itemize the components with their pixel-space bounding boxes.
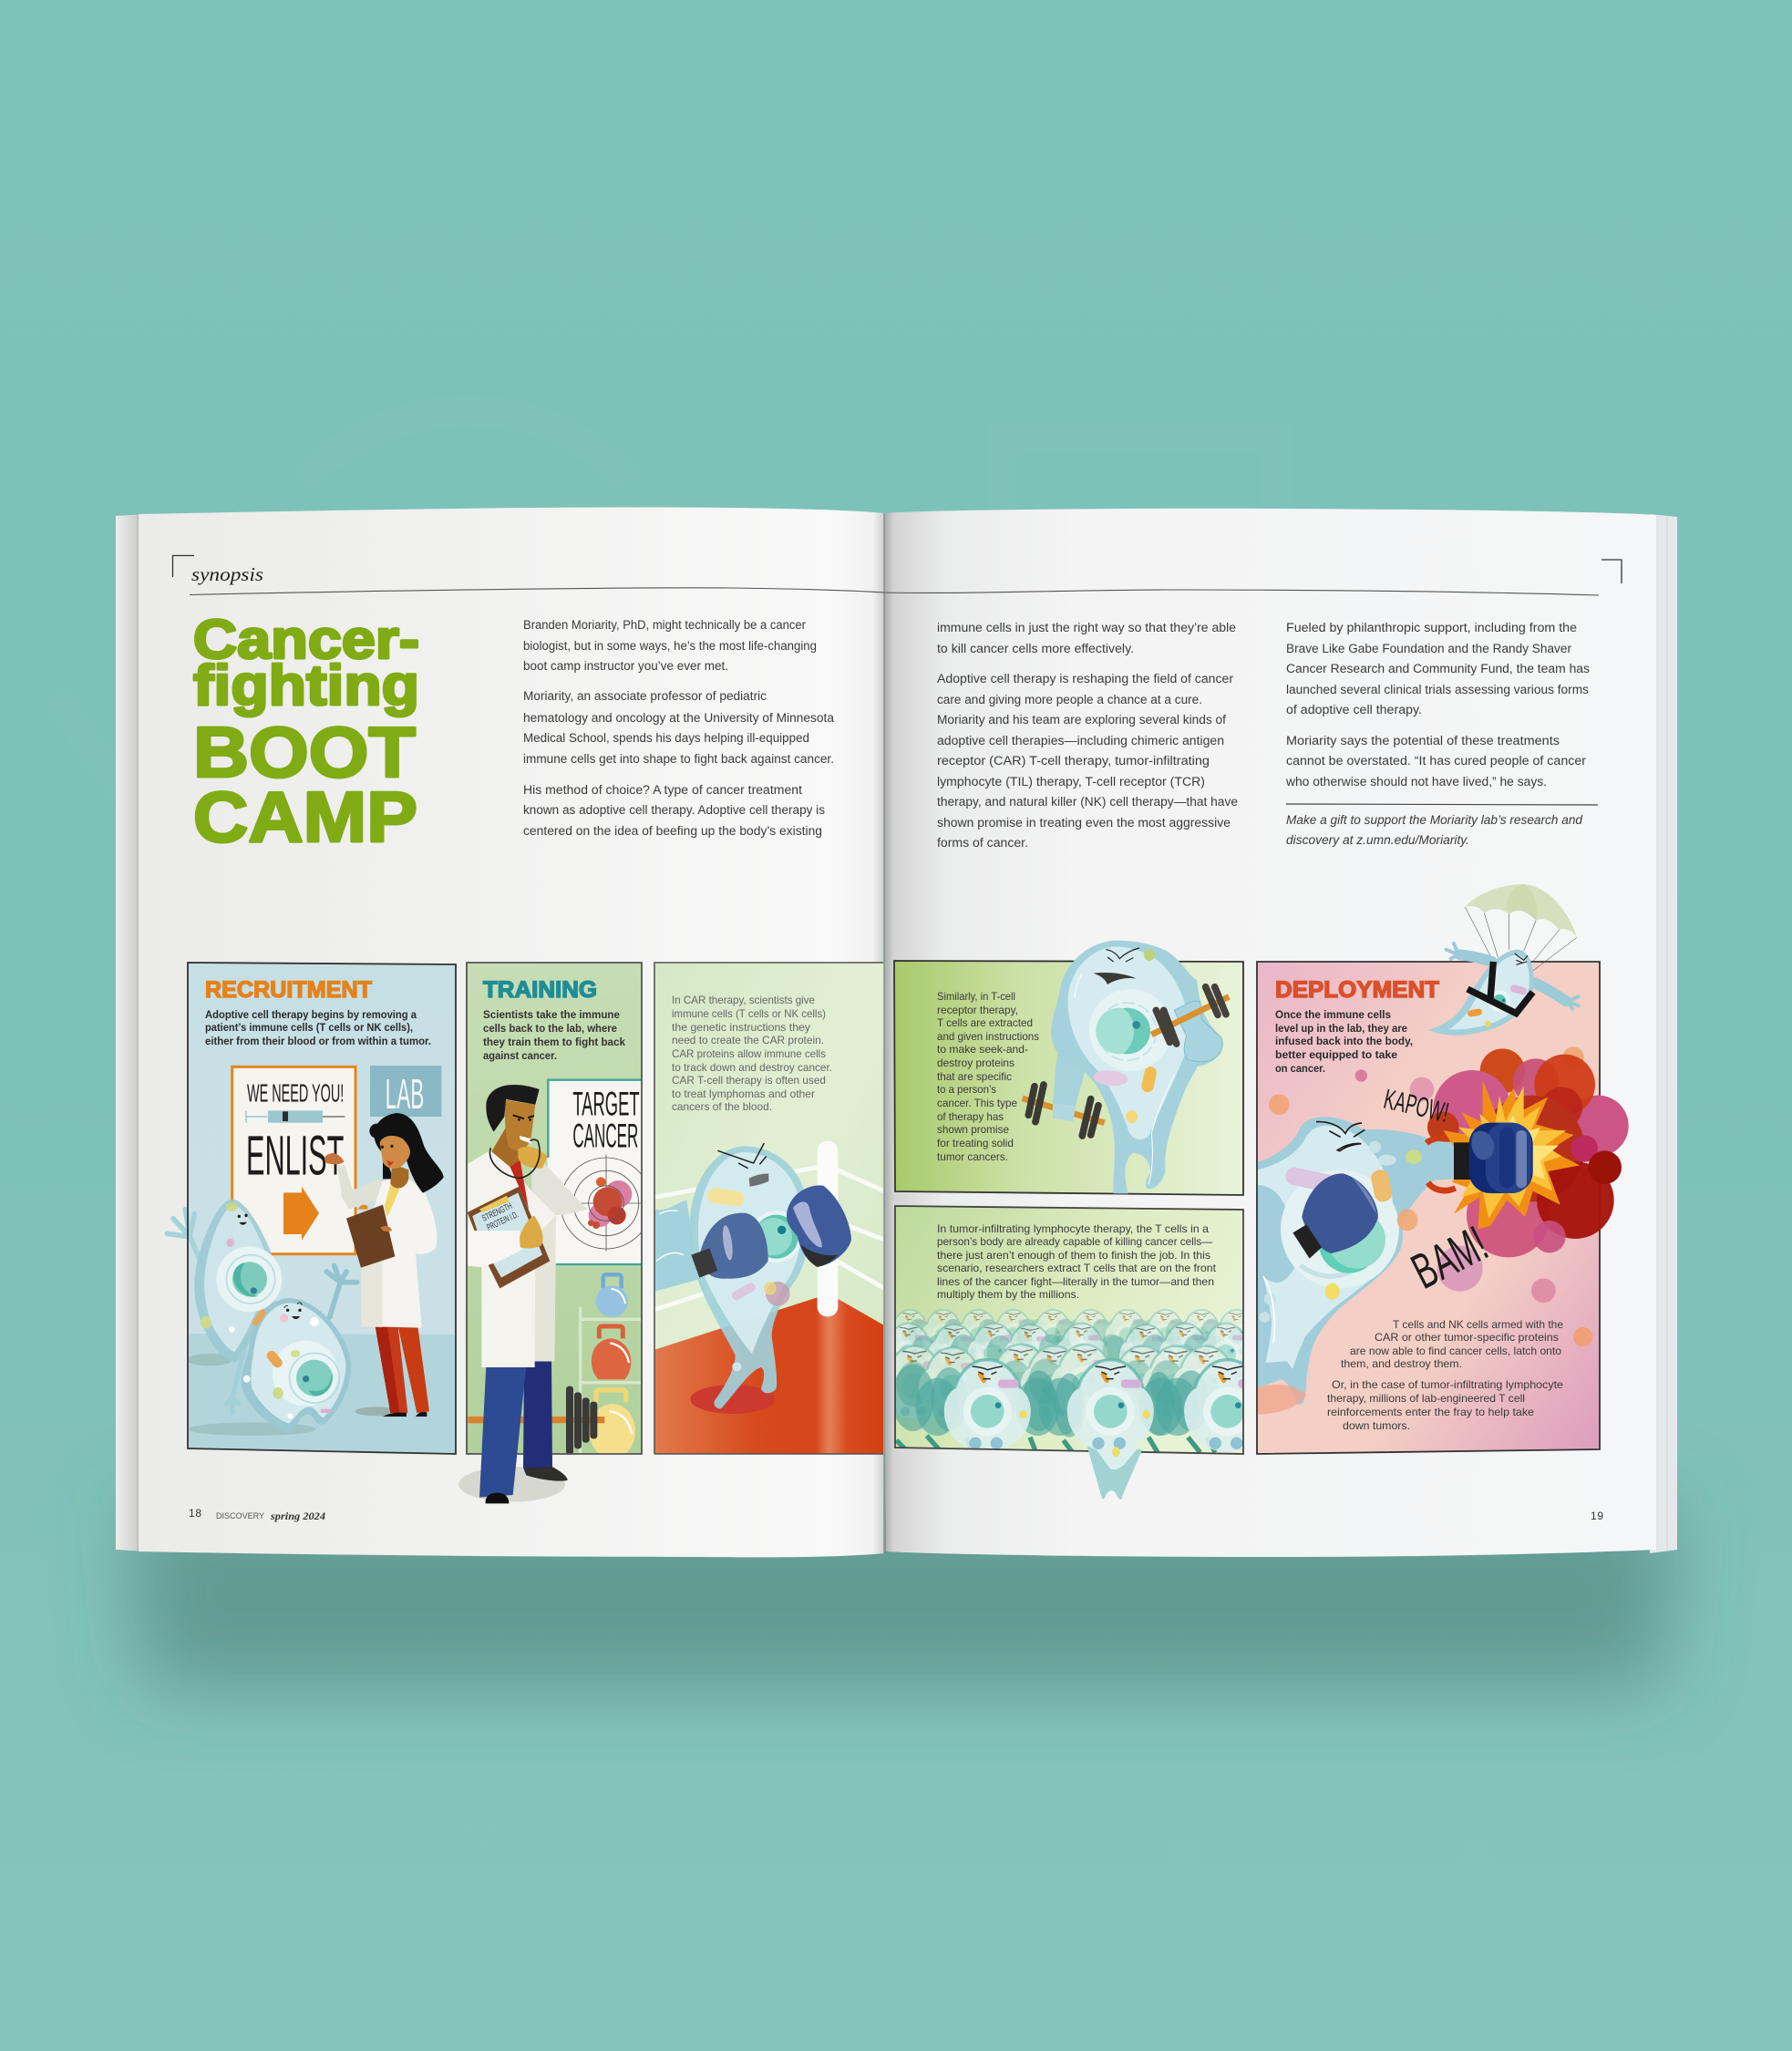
- body text column 1: Branden Moriarity, PhD, might technically be a cancer: [523, 618, 806, 632]
- car therapy text: cancers of the blood.: [672, 1100, 772, 1113]
- training gym illustration: [468, 1079, 652, 1458]
- footer left: spring 2024: [270, 1510, 325, 1522]
- kapow word: KAPOW!: [1381, 1084, 1452, 1129]
- deployment heading: DEPLOYMENT: [1275, 977, 1439, 1003]
- title: BOOT: [193, 712, 416, 792]
- body text column 2: lymphocyte (TIL) therapy, T-cell receptor (TCR): [937, 775, 1205, 788]
- middle rows: [895, 1322, 1243, 1418]
- upper dumbbell: [1151, 987, 1229, 1044]
- recruitment heading: RECRUITMENT: [205, 977, 372, 1003]
- body text column 1: centered on the idea of beefing up the body’s existing: [523, 824, 822, 838]
- left page: [139, 507, 884, 1557]
- car therapy text: CAR T-cell therapy is often used: [672, 1074, 826, 1087]
- book shadow: [128, 1504, 1677, 1686]
- tcr text: T cells are extracted: [937, 1016, 1033, 1029]
- front row: [915, 1360, 1059, 1452]
- til text: lines of the cancer fight—literally in the tumor—and then: [937, 1275, 1214, 1288]
- deployment illustration: [1258, 884, 1629, 1415]
- tcr text: and given instructions: [937, 1030, 1039, 1043]
- car therapy text: to track down and destroy cancer.: [672, 1061, 832, 1074]
- body text column 3: Brave Like Gabe Foundation and the Randy Shaver: [1286, 642, 1572, 655]
- body text column 2: receptor (CAR) T-cell therapy, tumor-infiltrating: [937, 754, 1210, 768]
- body text column 3: Cancer Research and Community Fund, the team has: [1286, 662, 1590, 675]
- deployment intro text: [1275, 1008, 1413, 1075]
- explosion cloud: [1427, 1046, 1629, 1257]
- boxing illustration: [654, 1141, 884, 1455]
- panel: tumor-infiltrating lymphocyte therapy: [894, 1205, 1244, 1500]
- body text column 3: discovery at z.umn.edu/Moriarity.: [1286, 833, 1469, 847]
- lower dumbbell: [1023, 1085, 1105, 1136]
- tcr text: shown promise: [937, 1123, 1009, 1136]
- body text column 1: hematology and oncology at the University of Minnesota: [523, 711, 834, 725]
- body text column 2: therapy, and natural killer (NK) cell therapy—that have: [937, 795, 1238, 809]
- tcr text: of therapy has: [937, 1110, 1004, 1123]
- til text: multiply them by the millions.: [937, 1288, 1079, 1301]
- lab sign: LAB: [386, 1070, 424, 1118]
- training text: they train them to fight back: [483, 1036, 625, 1048]
- panel: deployment: [1257, 884, 1629, 1454]
- body text column 2: [937, 621, 1238, 850]
- body text column 3: of adoptive cell therapy.: [1286, 703, 1422, 716]
- body text column 2: Moriarity and his team are exploring several kinds of: [937, 713, 1226, 727]
- car therapy text: [672, 994, 832, 1113]
- tcr text: to make seek-and-: [937, 1043, 1028, 1056]
- gym shelf: [581, 1306, 643, 1454]
- recruitment illustration: [167, 1066, 444, 1436]
- crop bracket right: [1601, 560, 1622, 583]
- section label: synopsis: [191, 563, 263, 585]
- body text column 2: care and giving more people a chance at a cure.: [937, 693, 1202, 706]
- car therapy text: immune cells (T cells or NK cells): [672, 1007, 826, 1020]
- teal blobs between front cells: [891, 1365, 1210, 1438]
- recruitment text: Adoptive cell therapy begins by removing a: [205, 1008, 417, 1021]
- body text column 1: His method of choice? A type of cancer treatment: [523, 783, 802, 797]
- crowd of t cells: [895, 1309, 1243, 1453]
- body text column 1: Medical School, spends his days helping ill-equipped: [523, 731, 809, 745]
- parachute: [1465, 884, 1577, 971]
- body text column 1: boot camp instructor you’ve ever met.: [523, 659, 728, 673]
- enlist poster: [232, 1067, 355, 1254]
- body text column 3: Fueled by philanthropic support, including from the: [1286, 621, 1577, 634]
- parachuting cell: [1428, 884, 1579, 1036]
- footer left: [189, 1507, 325, 1522]
- car therapy text: In CAR therapy, scientists give: [672, 994, 815, 1006]
- blue kettlebell: [596, 1274, 628, 1317]
- tcr text: Similarly, in T-cell: [937, 990, 1015, 1003]
- bam word: BAM!: [1403, 1215, 1496, 1300]
- starburst: [1443, 1080, 1580, 1229]
- title: CAMP: [193, 777, 417, 857]
- deployment closing text: Or, in the case of tumor-infiltrating lymphocyte: [1332, 1378, 1563, 1391]
- training text: cells back to the lab, where: [483, 1022, 617, 1035]
- deployment closing text: CAR or other tumor-specific proteins: [1375, 1331, 1559, 1344]
- til text: person’s body are already capable of killing cancer cells—: [937, 1235, 1212, 1248]
- body text column 3: [1285, 621, 1598, 847]
- title: [193, 609, 419, 857]
- header: synopsis and rules: [173, 556, 1622, 595]
- training text: Scientists take the immune: [483, 1008, 620, 1021]
- training text: [483, 1008, 625, 1062]
- footer left: 18: [189, 1507, 201, 1520]
- small background dots: [1269, 1069, 1592, 1346]
- right page: [884, 509, 1657, 1557]
- car therapy text: CAR proteins allow immune cells: [672, 1047, 826, 1060]
- panel: recruitment: [167, 963, 456, 1454]
- target cancer poster: [548, 1079, 652, 1264]
- recruitment text: either from their blood or from within a tumor.: [205, 1035, 431, 1047]
- panel: car therapy: [654, 963, 884, 1455]
- body text column 1: biologist, but in some ways, he’s the most life-changing: [523, 639, 817, 653]
- tcr text: that are specific: [937, 1070, 1012, 1083]
- body text column 3: launched several clinical trials assessing various forms: [1286, 683, 1589, 696]
- body text column 2: to kill cancer cells more effectively.: [937, 642, 1134, 655]
- cell character back: [167, 1200, 282, 1366]
- yellow kettlebell: [589, 1390, 635, 1458]
- body text column 1: Moriarity, an associate professor of pediatric: [523, 689, 767, 703]
- front boxing glove: [1454, 1123, 1533, 1193]
- body text column 2: immune cells in just the right way so that they’re able: [937, 621, 1236, 634]
- body text column 3: Make a gift to support the Moriarity lab’s research and: [1286, 813, 1582, 827]
- training text: against cancer.: [483, 1049, 557, 1062]
- trainer character: STRENGTH: [480, 1201, 514, 1224]
- tcr text: receptor therapy,: [937, 1004, 1018, 1016]
- left page edge: [116, 514, 146, 1551]
- body text column 2: adoptive cell therapies—including chimeric antigen: [937, 734, 1224, 747]
- header rule: [190, 588, 1599, 595]
- boxing cell: [654, 1143, 809, 1408]
- left boxing glove: [1293, 1173, 1378, 1259]
- deployment intro text: infused back into the body,: [1275, 1035, 1413, 1047]
- body text column 2: Adoptive cell therapy is reshaping the field of cancer: [937, 672, 1234, 685]
- scientist woman: [324, 1113, 444, 1417]
- deployment intro text: level up in the lab, they are: [1275, 1022, 1407, 1035]
- til text: In tumor-infiltrating lymphocyte therapy, the T cells in a: [937, 1222, 1209, 1235]
- tcr text: for treating solid: [937, 1137, 1014, 1149]
- big fighting cell: [1258, 1117, 1456, 1415]
- deployment closing text: T cells and NK cells armed with the: [1393, 1318, 1563, 1331]
- boxing ring: [654, 1141, 884, 1455]
- body text column 3: Moriarity says the potential of these treatments: [1286, 734, 1560, 747]
- car therapy text: the genetic instructions they: [672, 1021, 810, 1034]
- weightlifting cell: [1023, 941, 1229, 1196]
- trainer character: [458, 1085, 588, 1503]
- right page edge: [1650, 514, 1677, 1553]
- training heading: TRAINING: [483, 977, 597, 1003]
- punching arm ring: [1426, 1138, 1456, 1190]
- magazine spread: [116, 507, 1677, 1557]
- deployment closing text: therapy, millions of lab-engineered T cell: [1327, 1392, 1525, 1405]
- tcr text: to a person’s: [937, 1083, 996, 1096]
- car therapy text: need to create the CAR protein.: [672, 1034, 824, 1046]
- panel: training: [458, 963, 652, 1503]
- enlist poster: ENLIST: [246, 1125, 344, 1188]
- deployment closing text: are now able to find cancer cells, latch onto: [1350, 1345, 1561, 1357]
- body text column 3: cannot be overstated. “It has cured people of cancer: [1286, 754, 1587, 768]
- footer right: 19: [1591, 1510, 1603, 1522]
- orange kettlebell: [592, 1326, 631, 1379]
- teal overlap strip: [896, 1436, 1215, 1452]
- target cancer poster: CANCER: [572, 1117, 638, 1154]
- crop bracket left: [173, 556, 194, 577]
- tcr text: cancer. This type: [937, 1097, 1017, 1109]
- til text: [937, 1222, 1217, 1301]
- recruitment text: [205, 1008, 431, 1047]
- body text column 2: shown promise in treating even the most aggressive: [937, 816, 1231, 830]
- til text: there just aren’t enough of them to finish the job. In this: [937, 1249, 1210, 1262]
- tcr text: tumor cancers.: [937, 1150, 1008, 1163]
- footer left: DISCOVERY: [216, 1511, 265, 1521]
- target cancer poster: TARGET: [572, 1085, 640, 1122]
- recruitment text: patient’s immune cells (T cells or NK cells),: [205, 1021, 413, 1034]
- deployment closing text: down tumors.: [1343, 1419, 1410, 1432]
- deployment closing text: reinforcements enter the fray to help take: [1327, 1406, 1534, 1418]
- body text column 1: [523, 618, 834, 838]
- deployment closing text: them, and destroy them.: [1341, 1357, 1462, 1370]
- body text column 3: who otherwise should not have lived,” he says.: [1285, 775, 1547, 788]
- tcr text: destroy proteins: [937, 1056, 1014, 1069]
- title: Cancer-: [193, 609, 419, 670]
- barbell: [468, 1386, 604, 1455]
- trainer character: PROTEIN I.D.: [486, 1210, 520, 1233]
- back rows: [895, 1309, 1243, 1356]
- deployment intro text: Once the immune cells: [1275, 1008, 1391, 1021]
- body text column 1: known as adoptive cell therapy. Adoptive cell therapy is: [523, 803, 825, 817]
- title: fighting: [193, 654, 419, 717]
- body text column 1: immune cells get into shape to fight back against cancer.: [523, 752, 834, 766]
- tcr text: [937, 990, 1039, 1163]
- boxing gloves: [691, 1185, 851, 1279]
- front cell breaking out of panel: [1038, 1360, 1182, 1500]
- til text: scenario, researchers extract T cells that are on the front: [937, 1262, 1217, 1274]
- body text column 2: forms of cancer.: [937, 836, 1028, 850]
- deployment intro text: on cancer.: [1275, 1062, 1325, 1075]
- enlist poster: WE NEED YOU!: [247, 1078, 344, 1107]
- panel: t-cell receptor therapy: [894, 941, 1243, 1196]
- cell character front: [189, 1265, 357, 1436]
- deployment closing text: [1327, 1318, 1563, 1432]
- deployment intro text: better equipped to take: [1275, 1048, 1397, 1061]
- lab sign: [370, 1066, 441, 1118]
- car therapy text: to treat lymphomas and other: [672, 1087, 815, 1100]
